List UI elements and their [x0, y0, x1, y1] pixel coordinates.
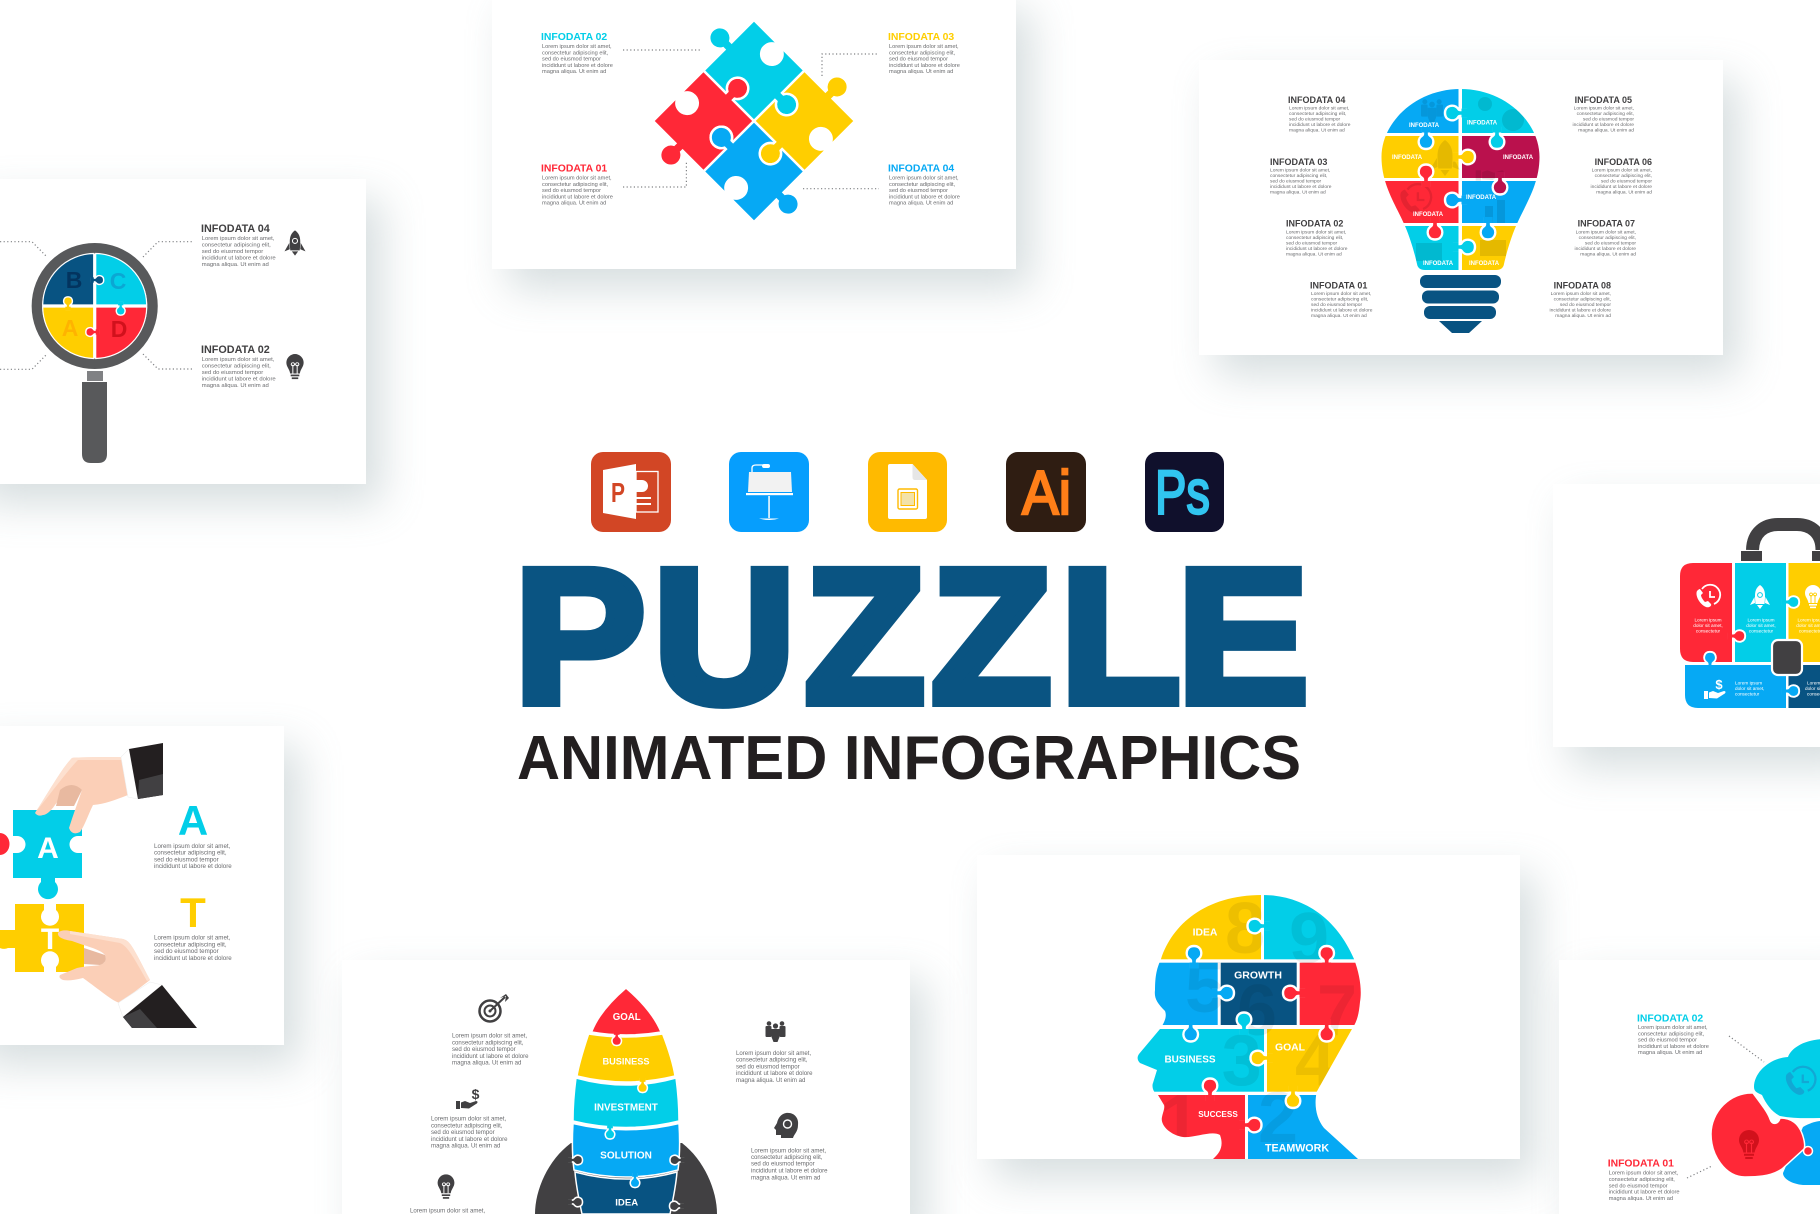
text block: bottom right: Lorem ipsum dolor sit amet,	[751, 1147, 826, 1154]
text: infodata 03: INFODATA 03	[1270, 157, 1327, 167]
text: infodata 05: consectetur adipiscing elit,	[1577, 111, 1634, 117]
text: infodata 02: magna aliqua. Ut enim ad	[202, 383, 269, 389]
text: infodata 03: incididunt ut labore et dolore	[889, 63, 960, 69]
icon: light bulb	[286, 354, 304, 379]
quadrant letters: D	[111, 316, 127, 342]
icon: head with gear	[774, 1113, 798, 1138]
text: infodata 02: INFODATA 02	[1286, 219, 1343, 229]
icon: target	[480, 994, 509, 1022]
text: infodata 03: Lorem ipsum dolor sit amet,	[1270, 168, 1330, 174]
ghost numbers	[1165, 902, 1354, 1142]
text: infodata 02	[1286, 219, 1348, 257]
briefcase labels: dolor sit amet,	[1693, 623, 1723, 628]
ghost numbers: 1	[1160, 1081, 1200, 1161]
text: infodata 04: INFODATA 04	[201, 223, 270, 235]
bulb glass pieces	[1382, 89, 1540, 270]
text: infodata 05: sed do eiusmod tempor	[1583, 117, 1634, 123]
text: infodata 01: Lorem ipsum dolor sit amet,	[542, 176, 612, 182]
text: infodata 07: sed do eiusmod tempor	[1585, 240, 1636, 246]
icon: rocket	[1750, 585, 1770, 609]
text block: bottom right: magna aliqua. Ut enim ad	[751, 1174, 820, 1181]
red knob	[1804, 1146, 1812, 1156]
text: infodata 02: magna aliqua. Ut enim ad	[542, 69, 606, 75]
panel: hands with puzzle pieces	[0, 726, 300, 1065]
text: infodata 05: incididunt ut labore et dolore	[1573, 122, 1634, 128]
ghost icons	[1400, 97, 1524, 261]
rocket fins	[535, 1143, 717, 1214]
text: infodata 04: consectetur adipiscing elit,	[889, 182, 956, 188]
puzzle diamond	[637, 4, 871, 238]
text: infodata 01: magna aliqua. Ut enim ad	[1311, 313, 1367, 319]
text: infodata 02: INFODATA 02	[201, 344, 270, 356]
briefcase pieces	[1680, 563, 1820, 708]
piece letters	[37, 832, 59, 956]
panel: magnifying glass puzzle	[0, 179, 382, 504]
rocket labels: GOAL	[613, 1012, 641, 1023]
text: infodata 01: magna aliqua. Ut enim ad	[1609, 1196, 1673, 1202]
text: infodata 03: magna aliqua. Ut enim ad	[1270, 190, 1326, 196]
text: infodata 02: magna aliqua. Ut enim ad	[1286, 251, 1342, 257]
text: infodata 07: magna aliqua. Ut enim ad	[1580, 251, 1636, 257]
head labels: GOAL	[1275, 1042, 1306, 1054]
text: infodata 05: Lorem ipsum dolor sit amet,	[1574, 106, 1634, 112]
text block: middle left: consectetur adipiscing elit,	[431, 1122, 503, 1129]
text: infodata 01: Lorem ipsum dolor sit amet,	[1609, 1171, 1679, 1177]
icon: phone clock	[1696, 585, 1720, 607]
text block: middle left: incididunt ut labore et dolore	[431, 1136, 508, 1143]
text: infodata 01: sed do eiusmod tempor	[1609, 1183, 1668, 1189]
text: infodata 02: INFODATA 02	[1637, 1014, 1703, 1024]
icon: light bulb	[438, 1174, 454, 1199]
joint knobs	[1419, 106, 1507, 254]
text: infodata 03	[888, 32, 960, 75]
text: infodata 03: sed do eiusmod tempor	[889, 57, 948, 63]
blue cloud piece	[1783, 1121, 1820, 1185]
text: infodata 06: Lorem ipsum dolor sit amet,	[1592, 168, 1652, 174]
quadrant knobs	[64, 276, 125, 336]
text: infodata 04	[888, 164, 960, 207]
text: infodata 05: INFODATA 05	[1575, 95, 1632, 105]
text: infodata 06: INFODATA 06	[1595, 157, 1652, 167]
text block: top right: Lorem ipsum dolor sit amet,	[736, 1050, 811, 1057]
text: infodata 04	[1288, 95, 1351, 134]
text: infodata 01: INFODATA 01	[1310, 280, 1367, 290]
text: infodata 02: INFODATA 02	[541, 32, 607, 43]
text: infodata 02: consectetur adipiscing elit,	[542, 50, 609, 56]
text: infodata 08: incididunt ut labore et dolore	[1550, 308, 1611, 314]
text: infodata 01: incididunt ut labore et dolore	[1311, 308, 1373, 314]
text: infodata 02: sed do eiusmod tempor	[1286, 240, 1337, 246]
text: infodata 08: magna aliqua. Ut enim ad	[1555, 313, 1611, 319]
icon: phone clock	[1786, 1067, 1815, 1095]
panel: head puzzle	[977, 855, 1536, 1179]
text: infodata 03	[1270, 157, 1332, 196]
rocket labels: INVESTMENT	[594, 1102, 658, 1114]
text: infodata 01: incididunt ut labore et dolore	[1609, 1190, 1680, 1196]
briefcase side labels	[1735, 680, 1820, 697]
head pieces	[1130, 889, 1365, 1161]
text: infodata 01: consectetur adipiscing elit,	[1311, 296, 1368, 302]
icon: Keynote	[729, 452, 809, 532]
text: infodata 01: magna aliqua. Ut enim ad	[542, 201, 606, 207]
head labels	[1164, 928, 1329, 1154]
icon: hand and dollar	[456, 1086, 480, 1109]
text: infodata 03: Lorem ipsum dolor sit amet,	[889, 44, 959, 50]
text block T: sed do eiusmod tempor	[154, 948, 219, 955]
ghost numbers: 9	[1289, 899, 1329, 979]
briefcase side labels: Lorem ipsum	[1735, 680, 1762, 686]
text block: top right: sed do eiusmod tempor	[736, 1063, 800, 1070]
text block: top left: magna aliqua. Ut enim ad	[452, 1060, 521, 1067]
text block T: consectetur adipiscing elit,	[154, 941, 227, 948]
text: infodata 02: Lorem ipsum dolor sit amet,	[1286, 229, 1346, 235]
icon: PowerPoint: P	[611, 477, 625, 508]
text block: bottom right: consectetur adipiscing elit,	[751, 1154, 823, 1161]
text: infodata 03: consectetur adipiscing elit,	[889, 50, 956, 56]
bulb piece labels: INFODATA	[1469, 261, 1500, 267]
text: infodata 04: incididunt ut labore et dolore	[889, 194, 960, 200]
panel: briefcase puzzle	[1553, 484, 1820, 767]
head labels: IDEA	[1193, 928, 1218, 938]
text: infodata 02	[201, 344, 276, 389]
panel: light bulb puzzle	[1199, 60, 1739, 375]
text: infodata 04: Lorem ipsum dolor sit amet,	[1289, 106, 1349, 112]
text block: bottom right: sed do eiusmod tempor	[751, 1161, 815, 1168]
head labels: GROWTH	[1234, 970, 1282, 982]
top hand	[35, 743, 163, 833]
red cloud piece	[1711, 1093, 1805, 1177]
text block: top right: magna aliqua. Ut enim ad	[736, 1077, 805, 1084]
text: infodata 04: sed do eiusmod tempor	[202, 249, 263, 255]
text: infodata 02: Lorem ipsum dolor sit amet,	[542, 44, 612, 50]
text: infodata 02: consectetur adipiscing elit,	[202, 364, 271, 370]
text: infodata 02: sed do eiusmod tempor	[202, 370, 263, 376]
text: infodata 01	[1310, 280, 1373, 319]
text: infodata 01	[541, 164, 613, 207]
text block A: incididunt ut labore et dolore	[154, 863, 232, 870]
text: infodata 02: sed do eiusmod tempor	[542, 57, 601, 63]
text: infodata 06: consectetur adipiscing elit,	[1595, 173, 1652, 179]
icon: Photoshop: Ps	[1155, 458, 1210, 528]
text: infodata 06: magna aliqua. Ut enim ad	[1596, 190, 1652, 196]
text: infodata 01: consectetur adipiscing elit,	[542, 182, 609, 188]
ghost numbers: 8	[1225, 889, 1265, 969]
head labels: TEAMWORK	[1265, 1142, 1329, 1154]
panel: rocket puzzle	[342, 960, 926, 1214]
yellow puzzle piece	[0, 904, 84, 972]
text block: top left: sed do eiusmod tempor	[452, 1046, 516, 1053]
head labels: BUSINESS	[1164, 1055, 1216, 1066]
text: infodata 02: incididunt ut labore et dolore	[202, 376, 276, 382]
quadrant pieces	[43, 254, 147, 358]
text: infodata 05	[1573, 95, 1634, 134]
title: PUZZLE: PUZZLE	[514, 530, 1309, 744]
text: infodata 02	[541, 32, 613, 75]
briefcase labels: Lorem ipsum	[1747, 618, 1775, 622]
text: infodata 06	[1591, 157, 1652, 196]
ghost numbers: 6	[1237, 971, 1277, 1051]
rocket body segments	[572, 988, 680, 1214]
text: infodata 03: INFODATA 03	[888, 32, 954, 43]
red knob fragment	[0, 833, 10, 855]
icon: hand and dollar	[1704, 677, 1726, 699]
cyan cloud piece	[1754, 1039, 1820, 1118]
cyan puzzle piece	[13, 810, 82, 899]
joint knobs	[1183, 919, 1334, 1132]
icon: rocket	[284, 230, 306, 256]
text: infodata 03: sed do eiusmod tempor	[1270, 179, 1321, 185]
rocket labels: BUSINESS	[603, 1056, 649, 1066]
text: infodata 07: Lorem ipsum dolor sit amet,	[1576, 229, 1636, 235]
text: infodata 01: INFODATA 01	[1608, 1158, 1674, 1170]
briefcase labels: consectetur	[1696, 628, 1721, 634]
briefcase labels: consectetur	[1749, 628, 1774, 634]
text block: top right: consectetur adipiscing elit,	[736, 1057, 808, 1064]
icon: hand and dollar: $	[1715, 677, 1723, 692]
text: infodata 04: sed do eiusmod tempor	[1289, 117, 1340, 123]
briefcase side labels: consectetur	[1735, 692, 1760, 697]
bulb piece labels	[1392, 120, 1534, 267]
text: infodata 07	[1575, 219, 1636, 257]
text block: middle left: Lorem ipsum dolor sit amet,	[431, 1116, 506, 1123]
text block: middle left: sed do eiusmod tempor	[431, 1129, 495, 1136]
briefcase labels	[1693, 618, 1820, 634]
quadrant letters: B	[66, 267, 82, 293]
icon: people	[766, 1021, 786, 1042]
text: infodata 02: incididunt ut labore et dolore	[1638, 1044, 1709, 1050]
text: infodata 08: Lorem ipsum dolor sit amet,	[1551, 291, 1611, 297]
panel: four piece puzzle	[492, 0, 1032, 289]
ghost numbers: 2	[1258, 1078, 1298, 1158]
text: infodata 01: consectetur adipiscing elit,	[1609, 1177, 1675, 1183]
rocket labels: IDEA	[615, 1198, 638, 1208]
text: infodata 02: Lorem ipsum dolor sit amet,	[202, 357, 275, 363]
text: infodata 02: Lorem ipsum dolor sit amet,	[1638, 1025, 1708, 1031]
bulb piece labels: INFODATA	[1466, 195, 1497, 201]
text: infodata 08	[1550, 280, 1611, 319]
briefcase joints	[1704, 596, 1799, 697]
text: infodata 07: INFODATA 07	[1578, 219, 1635, 229]
bulb piece labels: INFODATA	[1423, 261, 1454, 267]
connector lines	[623, 50, 879, 189]
bottom hand	[58, 930, 197, 1028]
text block: top left: Lorem ipsum dolor sit amet,	[452, 1033, 527, 1040]
text: infodata 04: consectetur adipiscing elit,	[202, 242, 271, 248]
text block T: Lorem ipsum dolor sit amet,	[154, 935, 231, 942]
rocket labels	[594, 1012, 658, 1208]
text: infodata 03: magna aliqua. Ut enim ad	[889, 69, 953, 75]
text: infodata 04	[201, 223, 276, 268]
text block A: sed do eiusmod tempor	[154, 856, 219, 863]
piece letters: T	[41, 923, 59, 956]
icon: bulb	[1805, 585, 1820, 608]
text: infodata 04: magna aliqua. Ut enim ad	[202, 262, 269, 268]
rocket joints	[568, 1031, 685, 1211]
text block: bottom right: incididunt ut labore et dolore	[751, 1167, 828, 1174]
ghost numbers: 5	[1185, 948, 1225, 1028]
text block A: consectetur adipiscing elit,	[154, 850, 227, 857]
briefcase labels: Lorem ipsum	[1694, 618, 1722, 622]
text: infodata 04: consectetur adipiscing elit,	[1289, 111, 1346, 117]
icon: hand and dollar: $	[472, 1086, 480, 1102]
ghost numbers: 3	[1222, 1021, 1262, 1101]
text: infodata 03: consectetur adipiscing elit,	[1270, 173, 1327, 179]
bulb piece labels: INFODATA	[1467, 120, 1498, 126]
text: infodata 08: INFODATA 08	[1554, 280, 1611, 290]
text: infodata 01	[1608, 1158, 1680, 1202]
text: infodata 02	[1637, 1014, 1709, 1056]
text block: top right: incididunt ut labore et dolore	[736, 1070, 813, 1077]
text: infodata 02: incididunt ut labore et dolore	[542, 63, 613, 69]
text: infodata 04: Lorem ipsum dolor sit amet,	[202, 236, 275, 242]
briefcase side labels: dolor sit amet,	[1735, 686, 1764, 691]
briefcase labels: dolor sit amet,	[1746, 623, 1776, 628]
subtitle: animated infographics: ANIMATED INFOGRAPHICS	[517, 724, 1301, 793]
text: infodata 05: magna aliqua. Ut enim ad	[1578, 128, 1634, 134]
ghost numbers: 7	[1317, 971, 1357, 1051]
bulb piece labels: INFODATA	[1413, 212, 1444, 218]
briefcase handle	[1741, 524, 1820, 561]
text block T: incididunt ut labore et dolore	[154, 955, 232, 962]
text: infodata 01: incididunt ut labore et dolore	[542, 194, 613, 200]
text: infodata 02: consectetur adipiscing elit,	[1638, 1031, 1705, 1037]
text: infodata 04: INFODATA 04	[1288, 95, 1345, 105]
text: infodata 01: Lorem ipsum dolor sit amet,	[1311, 291, 1371, 297]
text block: top left: incididunt ut labore et dolore	[452, 1053, 529, 1060]
text: infodata 08: sed do eiusmod tempor	[1560, 302, 1611, 308]
text: infodata 04: Lorem ipsum dolor sit amet,	[889, 176, 959, 182]
text: infodata 01: INFODATA 01	[541, 164, 607, 174]
text: infodata 02: sed do eiusmod tempor	[1638, 1038, 1697, 1044]
text: infodata 07: incididunt ut labore et dolore	[1575, 246, 1636, 252]
magnifier handle	[82, 371, 107, 463]
text: infodata 06: incididunt ut labore et dolore	[1591, 184, 1652, 190]
icon: Illustrator	[1006, 452, 1086, 532]
text: infodata 06: sed do eiusmod tempor	[1601, 179, 1652, 185]
quadrant letters	[62, 267, 127, 342]
text: infodata 02: consectetur adipiscing elit,	[1286, 235, 1343, 241]
text: infodata 04: magna aliqua. Ut enim ad	[889, 201, 953, 207]
text: infodata 01: sed do eiusmod tempor	[542, 188, 601, 194]
connector lines	[1687, 1036, 1764, 1178]
text block: top left: consectetur adipiscing elit,	[452, 1039, 524, 1046]
text: infodata 04: sed do eiusmod tempor	[889, 188, 948, 194]
text: infodata 04: incididunt ut labore et dolore	[1289, 122, 1351, 128]
panel: cloud puzzle	[1559, 960, 1820, 1214]
text block A: Lorem ipsum dolor sit amet,	[154, 843, 231, 850]
bulb piece labels: INFODATA	[1409, 123, 1440, 129]
big letter T: T	[180, 889, 206, 936]
magnifier ring	[37, 248, 153, 364]
text: infodata 04: magna aliqua. Ut enim ad	[1289, 128, 1345, 134]
piece letters: A	[37, 832, 59, 865]
icon: PowerPoint	[591, 452, 671, 532]
bulb screw base	[1420, 275, 1501, 333]
big letter A: A	[178, 797, 208, 844]
head labels: SUCCESS	[1198, 1110, 1238, 1119]
text: infodata 08: consectetur adipiscing elit,	[1554, 296, 1611, 302]
briefcase clasp	[1772, 640, 1802, 675]
text: infodata 02: magna aliqua. Ut enim ad	[1638, 1050, 1702, 1056]
quadrant letters: A	[62, 315, 78, 341]
icon: Illustrator: Ai	[1022, 459, 1071, 528]
bulb piece labels: INFODATA	[1392, 155, 1423, 161]
icon: Google Slides	[868, 452, 947, 532]
rocket labels: SOLUTION	[600, 1150, 652, 1162]
text block: middle left: magna aliqua. Ut enim ad	[431, 1143, 500, 1150]
text: infodata 01: sed do eiusmod tempor	[1311, 302, 1362, 308]
text: infodata 04: INFODATA 04	[888, 164, 954, 174]
connector lines	[0, 242, 193, 369]
text: infodata 02: incididunt ut labore et dolore	[1286, 246, 1348, 252]
bulb piece labels: INFODATA	[1503, 155, 1534, 161]
text: infodata 03: incididunt ut labore et dolore	[1270, 184, 1332, 190]
text: infodata 07: consectetur adipiscing elit,	[1579, 235, 1636, 241]
quadrant letters: C	[110, 268, 126, 294]
icon: bulb	[1739, 1130, 1759, 1159]
ghost numbers: 4	[1295, 1021, 1335, 1101]
text: infodata 04: incididunt ut labore et dolore	[202, 256, 276, 262]
